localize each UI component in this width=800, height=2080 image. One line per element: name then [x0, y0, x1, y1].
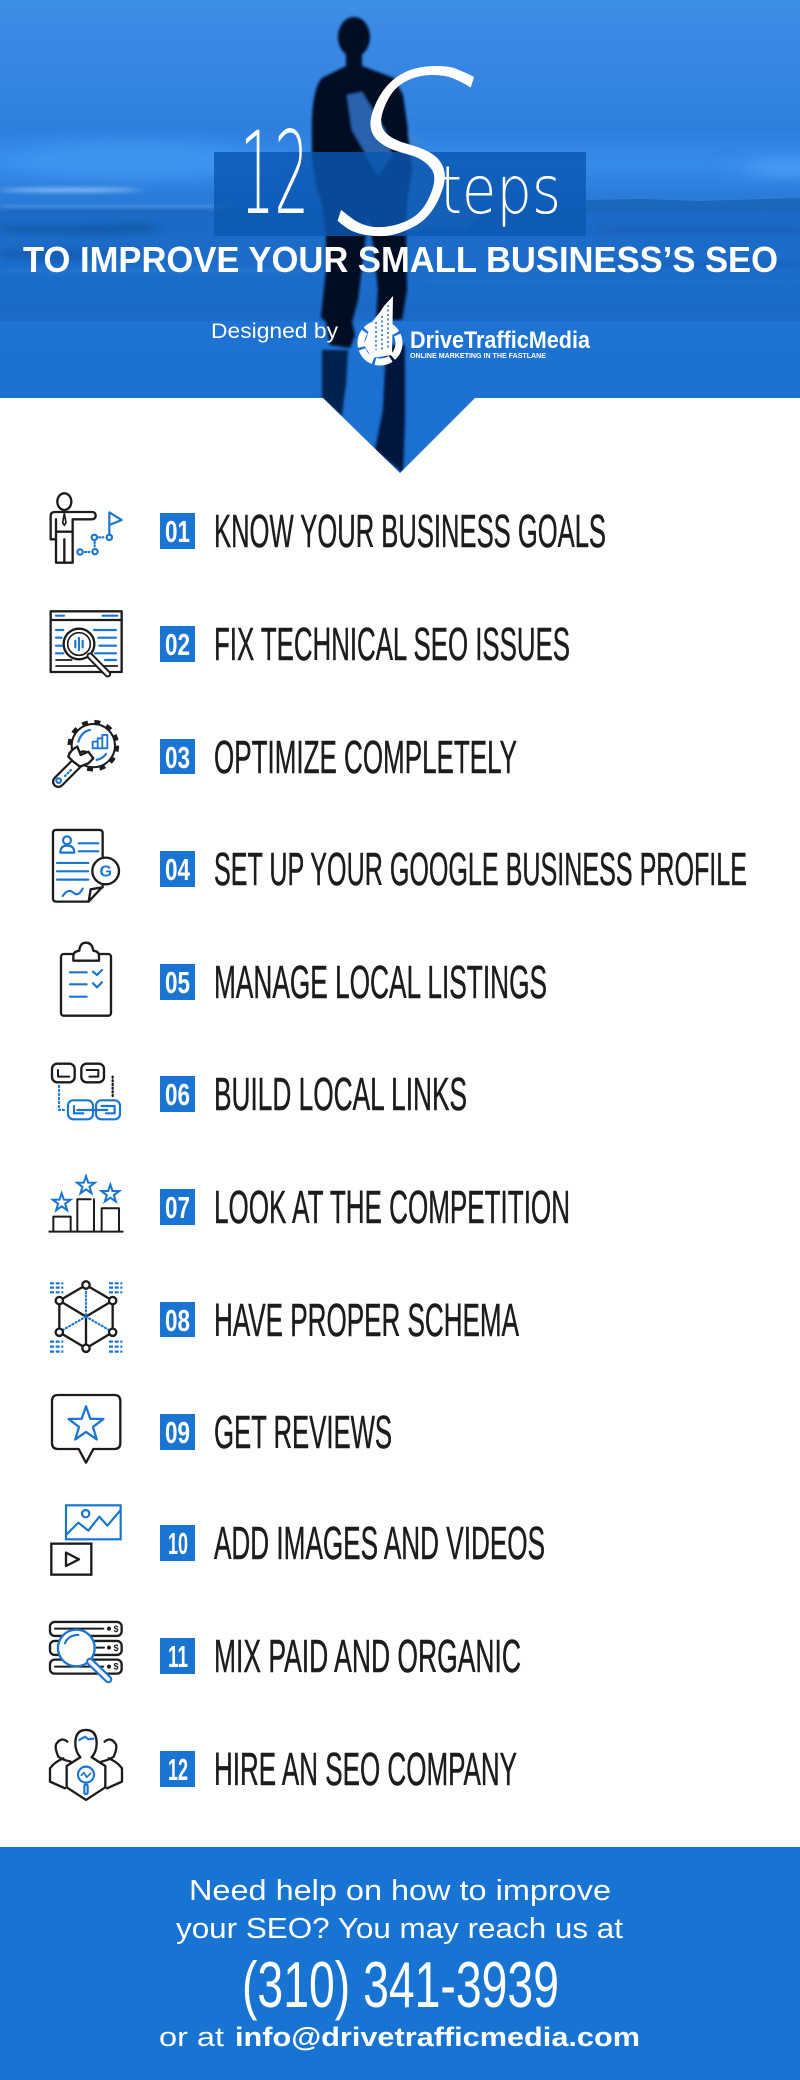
- footer background: [0, 1847, 800, 2080]
- panel: contact footer: [0, 1847, 800, 2080]
- icon: business profile document: G: [99, 864, 112, 881]
- title: 12 Steps: teps: [440, 152, 561, 229]
- number badge: [160, 1189, 195, 1225]
- icon: chain links: [52, 1064, 120, 1119]
- step 04: [53, 830, 747, 902]
- number: 11: [168, 1639, 188, 1674]
- number: 04: [165, 852, 191, 887]
- subtitle: TO IMPROVE YOUR SMALL BUSINESS’S SEO: [23, 239, 778, 280]
- step 10: [51, 1505, 545, 1575]
- logo: DriveTrafficMedia: ONLINE MARKETING IN THE FASTLANE: [410, 351, 546, 360]
- icon: gear and wrench: [56, 722, 117, 783]
- number: 08: [165, 1303, 190, 1338]
- panel: hero photo header with arrow: [0, 0, 800, 480]
- step label: HIRE AN SEO COMPANY: [214, 1743, 517, 1795]
- step 11: [50, 1622, 521, 1682]
- number badge: [160, 964, 195, 1000]
- number: 05: [165, 965, 190, 1000]
- logo: DriveTrafficMedia: DriveTrafficMedia: [410, 327, 591, 354]
- icon: paid listings with magnifier: $: [113, 1624, 118, 1634]
- logo: DriveTrafficMedia: [361, 296, 591, 362]
- step label: GET REVIEWS: [214, 1406, 392, 1458]
- number badge: [160, 1525, 195, 1561]
- shoreline: [0, 320, 800, 321]
- number badge: [160, 739, 195, 774]
- step label: MIX PAID AND ORGANIC: [214, 1630, 521, 1682]
- number badge: [160, 1751, 195, 1787]
- number badge: [160, 1076, 195, 1112]
- number: 07: [165, 1190, 190, 1225]
- number badge: [160, 851, 195, 887]
- title backing box: [214, 152, 586, 236]
- contact prompt: Need help on how to improve: [189, 1875, 611, 1907]
- designed by label: Designed by: [211, 320, 339, 343]
- number badge: [160, 1302, 195, 1337]
- email line: info@drivetrafficmedia.com: [235, 2022, 640, 2052]
- icon: paid listings with magnifier: $: [113, 1662, 118, 1672]
- step label: MANAGE LOCAL LISTINGS: [214, 956, 547, 1008]
- icon: schema cube: [50, 1281, 122, 1352]
- contact prompt: your SEO? You may reach us at: [176, 1913, 623, 1945]
- number badge: [160, 513, 195, 549]
- step 02: [51, 611, 570, 674]
- icon: bars with stars: [49, 1176, 123, 1232]
- number: 12: [168, 1752, 188, 1787]
- email line: or at: [159, 2022, 225, 2052]
- number: 01: [165, 514, 190, 549]
- step 01: [51, 493, 606, 563]
- icon: image and video frames: [51, 1505, 121, 1575]
- contact prompt: [176, 1875, 623, 1945]
- step 12: [50, 1730, 517, 1800]
- icon: clipboard checklist: [61, 943, 111, 1016]
- number badge: [160, 1414, 195, 1450]
- step 08: [50, 1281, 519, 1352]
- step 03: [56, 722, 517, 783]
- number: 06: [165, 1077, 190, 1112]
- number badge: [160, 1638, 195, 1674]
- number: 10: [168, 1526, 188, 1561]
- hero background photo: [0, 0, 800, 480]
- distant hills: [585, 198, 800, 212]
- icon: business profile document: [53, 830, 119, 902]
- number badge: [160, 626, 195, 662]
- step label: HAVE PROPER SCHEMA: [214, 1294, 519, 1346]
- icon: paid listings with magnifier: $: [113, 1643, 118, 1653]
- surfer silhouette: [310, 15, 424, 473]
- icon: SEO team: [50, 1730, 122, 1800]
- title: 12 Steps: 12: [240, 107, 309, 240]
- number: 03: [165, 740, 190, 775]
- icon: review speech bubble: [52, 1395, 120, 1463]
- phone number: (310) 341-3939: [242, 1948, 559, 2021]
- icon: web page with magnifier: [51, 611, 122, 674]
- icon: person pointing at flag: [51, 493, 122, 563]
- step label: OPTIMIZE COMPLETELY: [214, 731, 517, 783]
- step 06: [52, 1064, 467, 1120]
- icon: paid listings with magnifier: [50, 1622, 122, 1679]
- step 05: [61, 943, 547, 1016]
- number: 02: [165, 627, 190, 662]
- step 07: [49, 1176, 570, 1233]
- title: 12 Steps: S: [298, 25, 512, 287]
- step label: BUILD LOCAL LINKS: [214, 1068, 467, 1120]
- step 09: [52, 1395, 392, 1463]
- step label: ADD IMAGES AND VIDEOS: [214, 1517, 545, 1569]
- number: 09: [165, 1415, 190, 1450]
